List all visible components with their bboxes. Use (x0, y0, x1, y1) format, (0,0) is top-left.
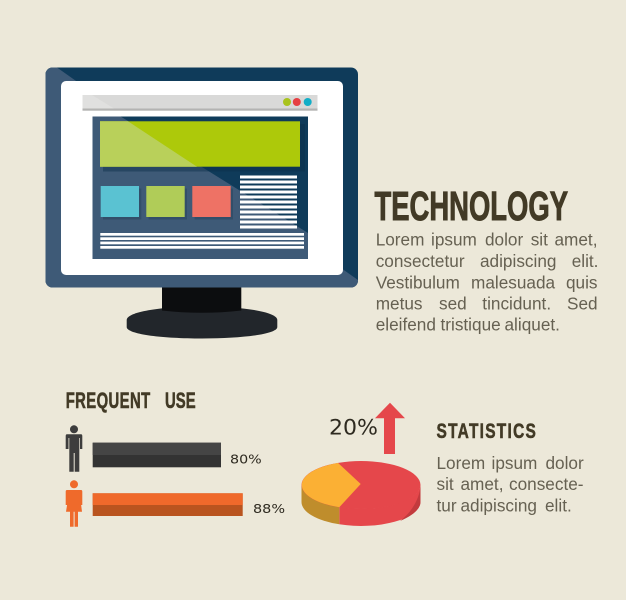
text lines: bottom (100, 233, 304, 249)
tile: blue (101, 186, 141, 220)
text block: technology body: Sed (567, 294, 598, 314)
text block: technology body: metus (376, 294, 423, 314)
text block: technology body: aliquet. (504, 315, 560, 335)
text block: statistics body: amet, (460, 474, 504, 494)
heading: frequent use: FREQUENT (66, 389, 150, 414)
text block: technology body: amet, (554, 230, 598, 250)
pie side: red (339, 485, 420, 526)
text block: statistics body (436, 453, 584, 515)
text block: technology body: adipiscing (480, 251, 556, 271)
web page panel (92, 116, 308, 259)
text block: statistics body: elit. (545, 495, 572, 515)
browser toolbar (82, 95, 318, 111)
pie chart (302, 461, 420, 526)
text block: technology body: consectetur (376, 251, 465, 271)
pie slice: yellow (302, 463, 361, 507)
heading: frequent use (66, 389, 196, 414)
tile: green (146, 186, 187, 220)
text block: statistics body: Lorem (436, 453, 485, 473)
text block: statistics body: tur (436, 495, 457, 515)
text block: technology body: dolor (485, 230, 523, 250)
label: 20%: 20% (329, 416, 378, 440)
text block: technology body: sit (531, 230, 548, 250)
label: 80%: 80% (230, 451, 262, 466)
hero banner (100, 121, 305, 172)
text block: technology body (376, 230, 598, 335)
icon: up arrow (375, 403, 405, 454)
pie slice: red (302, 461, 420, 509)
pie side edge (400, 485, 420, 521)
monitor stand base (127, 306, 277, 338)
text block: technology body: quis (566, 272, 598, 292)
text block: technology body: tristique (440, 315, 501, 335)
text block: technology body: malesuada (471, 272, 556, 292)
heading: statistics: STATISTICS (436, 418, 536, 442)
icon: woman (66, 480, 82, 527)
text block: statistics body: consecte- (509, 474, 584, 494)
text block: technology body: Lorem (376, 230, 424, 250)
text block: statistics body: ipsum (492, 453, 537, 473)
label: 88%: 88% (253, 501, 285, 516)
bar: men (93, 443, 221, 467)
monitor neck (162, 285, 241, 313)
text block: technology body: eleifend (376, 315, 436, 335)
tile: red (192, 186, 233, 220)
text block: statistics body: dolor (546, 453, 584, 473)
monitor screen (61, 81, 343, 275)
text block: technology body: tincidunt. (482, 294, 551, 314)
heading: frequent use: USE (165, 389, 196, 414)
text block: technology body: elit. (572, 251, 598, 271)
bar: women (93, 493, 243, 516)
icon: desktop monitor (46, 68, 358, 338)
text block: technology body: sed (439, 294, 467, 314)
text block: technology body: Vestibulum (376, 272, 460, 292)
text lines: side column (240, 176, 297, 228)
text block: technology body: ipsum (431, 230, 477, 250)
pie side: yellow (302, 485, 339, 524)
monitor frame (46, 68, 358, 288)
text block: statistics body: adipiscing (460, 495, 537, 515)
text block: statistics body: sit (436, 474, 454, 494)
icon: man (66, 425, 82, 472)
